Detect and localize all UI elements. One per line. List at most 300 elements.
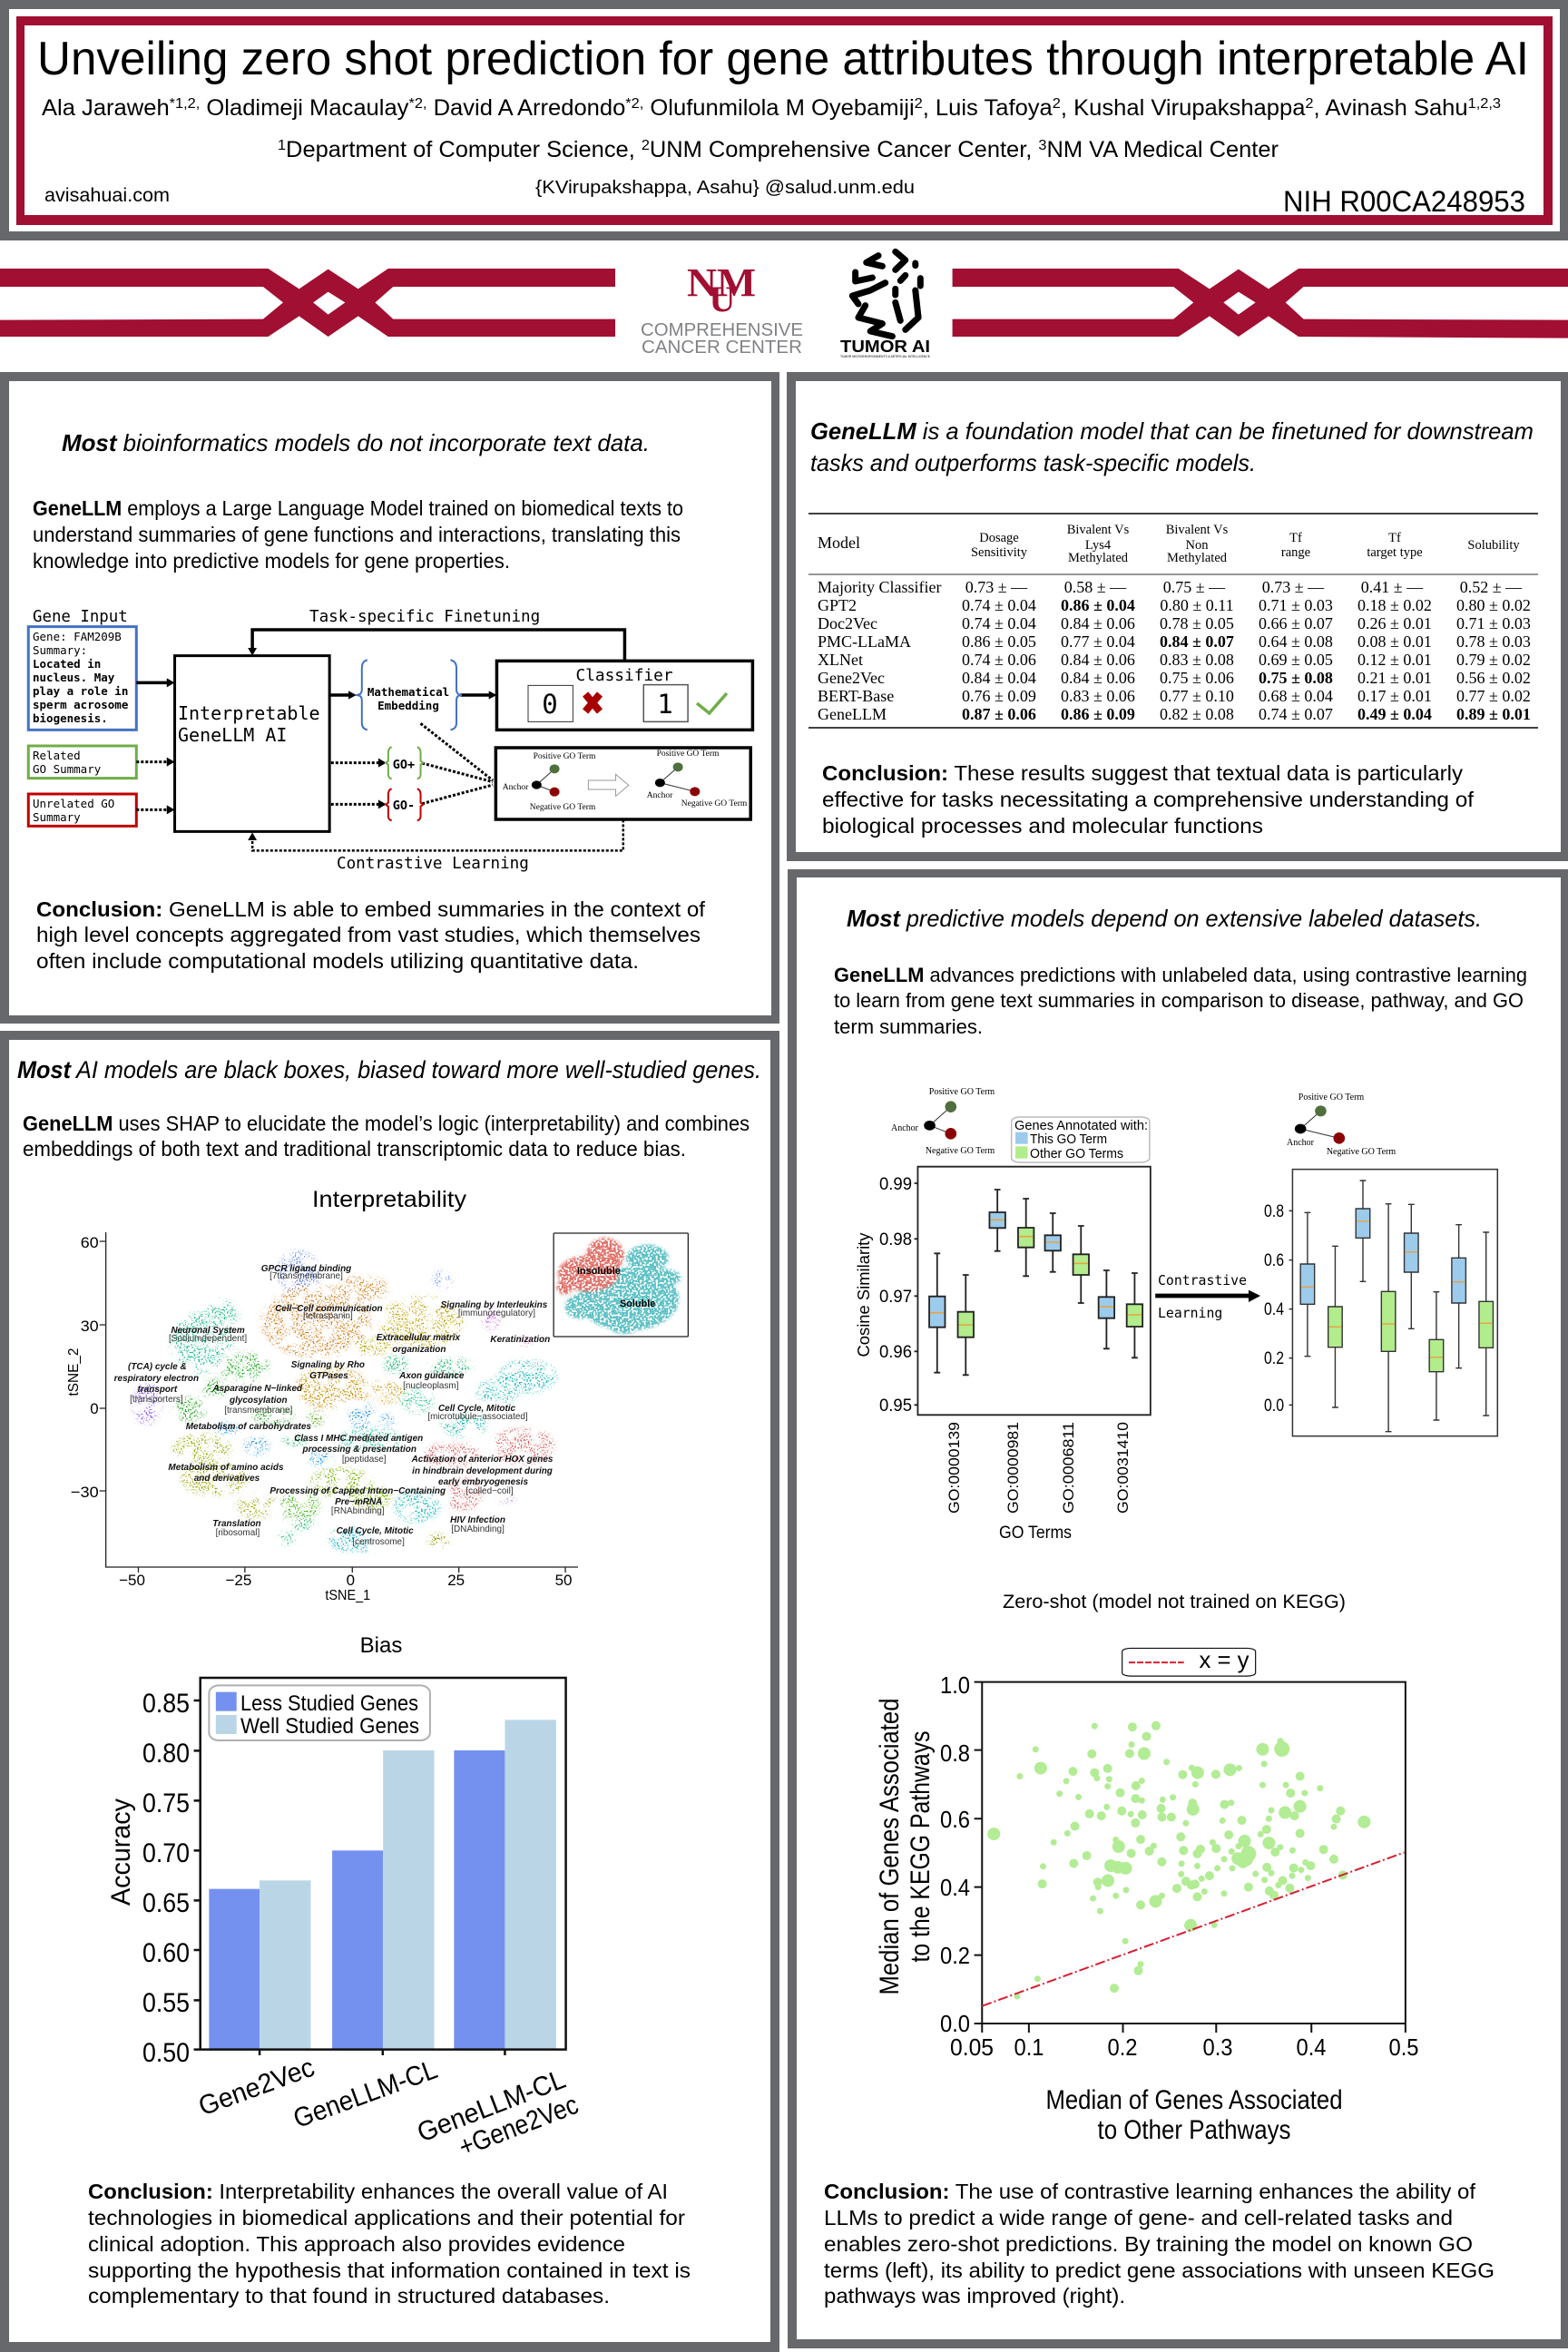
scatter y axis title: to the KEGG Pathways bbox=[906, 1731, 936, 1962]
logo: UNM comprehensive cancer center: U bbox=[710, 279, 735, 319]
conclusion text: complementary to that found in structured databases. bbox=[88, 2284, 610, 2308]
tSNE cluster labels: Signaling by Interleukins bbox=[441, 1300, 548, 1310]
conclusion text: pathways was improved (right). bbox=[824, 2284, 1125, 2308]
authors: , Kushal Virupakshappa bbox=[1061, 95, 1306, 121]
table header: range bbox=[1281, 545, 1310, 560]
gene input text: sperm acrosome bbox=[33, 698, 129, 711]
left graph icon bbox=[924, 1101, 956, 1140]
bias legend labels: Well Studied Genes bbox=[240, 1714, 419, 1739]
arrowheads bbox=[167, 648, 496, 840]
table rows: 0.87 ± 0.06 bbox=[962, 705, 1036, 723]
authors: David A Arredondo bbox=[426, 95, 625, 121]
logo: Tumor AI: TUMOR MICROENVIRONMENTS & ARTIFICIAL INTELLIGENCE bbox=[840, 354, 930, 358]
bias y tick labels: 0.50 bbox=[142, 2038, 190, 2068]
left y tick labels: 0.95 bbox=[879, 1396, 912, 1416]
GO term tick labels: GO:0000981 bbox=[1004, 1422, 1022, 1514]
class 0 box bbox=[528, 685, 573, 721]
classifier box bbox=[496, 661, 752, 730]
table rows: 0.52 ± — bbox=[1460, 578, 1523, 596]
bias y tick labels: 0.60 bbox=[142, 1938, 190, 1968]
tSNE cluster labels: [ribosomal] bbox=[216, 1528, 260, 1538]
scatter x tick labels: 0.1 bbox=[1014, 2035, 1044, 2061]
intro text bbox=[23, 1112, 750, 1161]
table header: Sensitivity bbox=[971, 545, 1028, 560]
intro text: understand summaries of gene functions and interactions, translating this bbox=[33, 523, 681, 546]
bias x labels: GeneLLM-CL bbox=[413, 2064, 570, 2148]
scatter x tick labels: 0.5 bbox=[1388, 2035, 1419, 2061]
heading: Most bioinformatics models do not incorporate text data. bbox=[62, 429, 650, 456]
right plot frame bbox=[1289, 1170, 1497, 1436]
table rows: 0.58 ± — bbox=[1064, 578, 1127, 596]
tSNE cluster labels: early embryogenesis bbox=[438, 1477, 528, 1487]
table rows: 0.80 ± 0.02 bbox=[1456, 596, 1531, 614]
conclusion text: LLMs to predict a wide range of gene- and cell-related tasks and bbox=[824, 2206, 1453, 2230]
intro text: knowledge into predictive models for gene properties. bbox=[33, 549, 510, 573]
table rows: 0.80 ± 0.11 bbox=[1160, 596, 1234, 614]
tSNE cluster labels: [centrosome] bbox=[352, 1537, 405, 1547]
left plot frame bbox=[915, 1167, 1151, 1415]
intro text: to learn from gene text summaries in comparison to disease, pathway, and GO bbox=[834, 989, 1524, 1012]
contrastive graph labels bbox=[503, 750, 748, 812]
table rows: 0.83 ± 0.06 bbox=[1061, 687, 1135, 705]
unrelated GO text: Summary bbox=[33, 810, 81, 824]
tSNE tick labels: −30 bbox=[71, 1484, 99, 1501]
authors: 1,2,3 bbox=[1468, 96, 1501, 112]
table rows: 0.75 ± — bbox=[1163, 578, 1226, 596]
tSNE clusters bbox=[132, 1250, 556, 1553]
tSNE cluster labels: [DNAbinding] bbox=[451, 1524, 505, 1534]
right y tick labels: 0.2 bbox=[1264, 1349, 1284, 1368]
website: avisahuai.com bbox=[44, 185, 170, 206]
GeneLLM label bbox=[178, 702, 320, 746]
intro text bbox=[834, 964, 1527, 1038]
solubility inset: Insoluble bbox=[577, 1266, 621, 1277]
left y tick labels: 0.99 bbox=[879, 1175, 912, 1194]
heading: Most predictive models depend on extensive labeled datasets. bbox=[847, 905, 1482, 932]
authors: *2, bbox=[408, 96, 426, 112]
logo: Tumor AI: TUMOR AI bbox=[840, 338, 930, 356]
tSNE cluster labels: respiratory electron bbox=[114, 1374, 199, 1384]
tSNE cluster labels: organization bbox=[392, 1345, 446, 1355]
graph icon labels: Negative GO Term bbox=[926, 1146, 995, 1156]
bias y tick labels: 0.70 bbox=[142, 1838, 190, 1868]
left blue boxes bbox=[929, 1212, 1114, 1328]
chart frame bbox=[194, 1678, 566, 2055]
GO term labels: GO- bbox=[393, 799, 415, 813]
scatter y tick labels: 0.6 bbox=[940, 1808, 970, 1833]
interpretability heading: Interpretability bbox=[312, 1187, 467, 1212]
table rows: 0.73 ± — bbox=[965, 578, 1028, 596]
contrastive graph labels: Positive GO Term bbox=[657, 750, 720, 759]
GO term tick labels: GO:0031410 bbox=[1114, 1422, 1132, 1514]
table header: target type bbox=[1367, 545, 1423, 560]
tSNE tick labels: −50 bbox=[119, 1572, 145, 1589]
icon: red cross bbox=[585, 694, 600, 711]
graph icon labels: Positive GO Term bbox=[929, 1087, 995, 1097]
scatter points small bbox=[1017, 1726, 1334, 1996]
table rows: 0.84 ± 0.06 bbox=[1061, 669, 1135, 687]
table rows: 0.12 ± 0.01 bbox=[1357, 651, 1432, 669]
bias x labels: GeneLLM-CL bbox=[289, 2054, 441, 2134]
right blue boxes bbox=[1300, 1209, 1465, 1304]
table rows: 0.77 ± 0.10 bbox=[1160, 687, 1234, 705]
table rows: 0.84 ± 0.04 bbox=[962, 669, 1036, 687]
contrastive graph labels: Anchor bbox=[503, 783, 529, 792]
intro text bbox=[33, 496, 683, 573]
table rules bbox=[808, 514, 1538, 728]
tSNE cluster labels: Extracellular matrix bbox=[377, 1333, 460, 1343]
right y tick labels: 0.6 bbox=[1264, 1251, 1284, 1270]
right y tick labels: 0.4 bbox=[1264, 1300, 1284, 1319]
tSNE cluster labels: Metabolism of amino acids bbox=[168, 1463, 284, 1473]
affiliations: Department of Computer Science, bbox=[286, 137, 642, 162]
x=y legend box bbox=[1122, 1648, 1256, 1676]
tSNE tick labels: −25 bbox=[225, 1572, 251, 1589]
unrelated GO box bbox=[28, 794, 136, 826]
table header: Model bbox=[818, 534, 860, 552]
right medians bbox=[1301, 1221, 1492, 1357]
authors: 2 bbox=[1305, 96, 1314, 112]
left y axis title: Cosine Similarity bbox=[855, 1232, 873, 1357]
scatter x tick labels: 0.05 bbox=[950, 2035, 994, 2061]
GO term tick labels: GO:0006811 bbox=[1060, 1422, 1077, 1514]
table rows: 0.82 ± 0.08 bbox=[1160, 705, 1234, 723]
table rows: 0.84 ± 0.07 bbox=[1160, 632, 1234, 651]
left green boxes bbox=[958, 1228, 1142, 1338]
tSNE cluster labels: [nucleoplasm] bbox=[403, 1381, 459, 1391]
conclusion text bbox=[88, 2180, 691, 2308]
scatter x axis title: to Other Pathways bbox=[1098, 2115, 1290, 2145]
grant number: NIH R00CA248953 bbox=[1283, 185, 1525, 218]
legend box bbox=[1012, 1117, 1150, 1162]
table rows: 0.08 ± 0.01 bbox=[1357, 632, 1432, 651]
scatter frame bbox=[975, 1682, 1406, 2033]
table rows: 0.68 ± 0.04 bbox=[1259, 687, 1333, 705]
table rows: 0.74 ± 0.04 bbox=[962, 596, 1036, 614]
table rows: 0.78 ± 0.03 bbox=[1456, 632, 1531, 651]
table rows: GeneLLM bbox=[818, 705, 887, 723]
affiliations: UNM Comprehensive Cancer Center, bbox=[650, 137, 1038, 162]
unrelated GO text: Unrelated GO bbox=[33, 797, 114, 810]
left whiskers bbox=[934, 1190, 1138, 1375]
related GO text: GO Summary bbox=[33, 762, 102, 776]
GO+ braces bbox=[386, 747, 423, 779]
bars GeneLLM-CL+Gene2Vec bbox=[454, 1720, 556, 2050]
tSNE cluster labels: GTPases bbox=[309, 1371, 348, 1381]
tSNE cluster labels: Class I MHC mediated antigen bbox=[294, 1434, 423, 1444]
bias legend box bbox=[209, 1685, 430, 1740]
table rows: 0.83 ± 0.08 bbox=[1160, 651, 1234, 669]
conclusion text: biological processes and molecular functions bbox=[822, 814, 1263, 838]
table header: Lys4 bbox=[1085, 538, 1112, 553]
table rows: Majority Classifier bbox=[818, 578, 941, 596]
tSNE cluster labels: glycosylation bbox=[229, 1396, 288, 1406]
table rows: 0.74 ± 0.06 bbox=[962, 651, 1036, 669]
unrelated GO text bbox=[33, 797, 114, 824]
authors: Olufunmilola M Oyebamiji bbox=[643, 95, 915, 121]
table rows: 0.84 ± 0.06 bbox=[1061, 614, 1135, 632]
table header: Methylated bbox=[1068, 551, 1129, 565]
bias x labels: +Gene2Vec bbox=[455, 2090, 583, 2162]
embedding label bbox=[368, 685, 449, 712]
finetuning label: Task-specific Finetuning bbox=[309, 608, 540, 626]
authors: *2, bbox=[625, 96, 643, 112]
gene input box bbox=[28, 627, 136, 730]
header frame bbox=[0, 0, 1568, 240]
heading: Most AI models are black boxes, biased toward more well-studied genes. bbox=[17, 1056, 761, 1083]
bias x labels bbox=[195, 2053, 583, 2162]
tSNE chart bbox=[66, 1232, 688, 1603]
bias y axis title: Accuracy bbox=[106, 1798, 136, 1906]
tSNE cluster labels: [immunoregulatory] bbox=[458, 1308, 535, 1318]
table rows: 0.74 ± 0.07 bbox=[1259, 705, 1333, 723]
classifier labels: 1 bbox=[657, 689, 673, 720]
GO term tick labels: GO:0000139 bbox=[946, 1422, 963, 1514]
GO terms axis title: GO Terms bbox=[999, 1524, 1072, 1543]
related GO box bbox=[28, 746, 136, 779]
tSNE cluster labels: [coiled−coil] bbox=[466, 1486, 514, 1496]
table rows: 0.21 ± 0.01 bbox=[1357, 669, 1432, 687]
logo: Tumor AI bbox=[840, 251, 930, 358]
affiliations: NM VA Medical Center bbox=[1047, 137, 1279, 162]
tSNE cluster labels: transport bbox=[138, 1385, 178, 1395]
right green boxes bbox=[1328, 1291, 1493, 1372]
tSNE tick labels bbox=[71, 1234, 573, 1589]
scatter y tick labels bbox=[940, 1673, 970, 2037]
solubility inset bbox=[554, 1233, 688, 1337]
scatter y tick labels: 0.4 bbox=[940, 1876, 970, 1901]
bars Gene2Vec bbox=[209, 1880, 310, 2050]
table rows: Doc2Vec bbox=[818, 614, 877, 632]
graph icon labels: Negative GO Term bbox=[1327, 1147, 1396, 1157]
authors: 2 bbox=[1053, 96, 1061, 112]
bias y tick labels bbox=[142, 1689, 190, 2068]
tSNE cluster labels: Axon guidance bbox=[398, 1371, 465, 1381]
table rows: 0.18 ± 0.02 bbox=[1357, 596, 1432, 614]
logo: UNM comprehensive cancer center bbox=[641, 260, 803, 358]
embedding label: Embedding bbox=[377, 699, 439, 712]
tSNE cluster labels: Processing of Capped Intron−Containing bbox=[270, 1486, 446, 1496]
logo: UNM comprehensive cancer center: COMPREHENSIVE bbox=[641, 320, 803, 340]
affiliations: 1 bbox=[278, 138, 286, 153]
solubility inset: Soluble bbox=[620, 1298, 655, 1309]
table header bbox=[818, 523, 1520, 565]
GeneLLM label: Interpretable bbox=[178, 702, 320, 724]
table header: Tf bbox=[1388, 531, 1401, 545]
workflow diagram bbox=[28, 608, 752, 873]
tSNE axis titles: tSNE_1 bbox=[325, 1588, 370, 1603]
tSNE cluster labels: Translation bbox=[212, 1519, 261, 1529]
left medians bbox=[930, 1220, 1142, 1325]
tSNE cluster labels bbox=[114, 1264, 554, 1547]
legend labels: This GO Term bbox=[1030, 1132, 1107, 1147]
logo: UNM comprehensive cancer center: NM bbox=[687, 260, 756, 305]
table rows: 0.76 ± 0.09 bbox=[962, 687, 1036, 705]
zero-shot caption: Zero-shot (model not trained on KEGG) bbox=[1003, 1592, 1346, 1612]
scatter y tick labels: 1.0 bbox=[940, 1673, 970, 1699]
GO term labels bbox=[393, 758, 415, 813]
scatter x tick labels: 0.2 bbox=[1107, 2035, 1138, 2061]
legend label: x = y bbox=[1200, 1646, 1249, 1673]
conclusion text: effective for tasks necessitating a comprehensive understanding of bbox=[822, 788, 1475, 811]
tSNE cluster labels: [7transmembrane] bbox=[270, 1271, 343, 1281]
table rows: 0.86 ± 0.05 bbox=[962, 632, 1036, 651]
legend labels bbox=[1014, 1118, 1148, 1161]
legend labels: Genes Annotated with: bbox=[1014, 1118, 1148, 1133]
GO- braces bbox=[386, 789, 423, 820]
table rows: 0.66 ± 0.07 bbox=[1259, 614, 1333, 632]
tSNE cluster labels: Cell Cycle, Mitotic bbox=[438, 1404, 516, 1414]
right y tick labels bbox=[1264, 1202, 1284, 1416]
classifier labels: Classifier bbox=[575, 666, 673, 685]
table header: Solubility bbox=[1467, 538, 1520, 553]
intro text: term summaries. bbox=[834, 1015, 983, 1038]
gene input text bbox=[33, 630, 129, 725]
table rows: 0.84 ± 0.06 bbox=[1061, 651, 1135, 669]
conclusion text: clinical adoption. This approach also provides evidence bbox=[88, 2232, 625, 2256]
panel: foundation model bbox=[787, 372, 1568, 861]
table rows: 0.73 ± — bbox=[1262, 578, 1325, 596]
scatter points extra large bbox=[1246, 1749, 1282, 1858]
contrastive learning label: Contrastive Learning bbox=[337, 855, 529, 873]
scatter y axis title bbox=[875, 1699, 936, 1994]
gene input text: nucleus. May bbox=[33, 671, 115, 684]
x=y reference line bbox=[982, 1852, 1405, 2006]
authors: , Avinash Sahu bbox=[1314, 95, 1468, 121]
graph icon labels: Anchor bbox=[1287, 1138, 1315, 1148]
panel: black boxes and bias bbox=[0, 1031, 779, 2352]
bias heading: Bias bbox=[360, 1633, 402, 1658]
scatter plot bbox=[875, 1646, 1419, 2145]
right whiskers bbox=[1305, 1181, 1489, 1432]
tSNE cluster labels: and derivatives bbox=[194, 1474, 260, 1484]
table rows: 0.49 ± 0.04 bbox=[1357, 705, 1432, 723]
conclusion text bbox=[822, 761, 1475, 838]
panel: labeled datasets bbox=[788, 869, 1568, 2348]
GO term tick labels bbox=[946, 1422, 1132, 1514]
conclusion text: high level concepts aggregated from vast studies, which themselves bbox=[36, 923, 701, 946]
affiliations: 2 bbox=[642, 138, 650, 153]
tSNE tick labels: 30 bbox=[81, 1318, 99, 1335]
authors: , Luis Tafoya bbox=[923, 95, 1053, 121]
scatter points large bbox=[994, 1749, 1364, 1926]
bias bar chart bbox=[106, 1678, 583, 2162]
heading bbox=[810, 417, 1534, 476]
affiliations: 3 bbox=[1038, 138, 1047, 153]
scatter y axis title: Median of Genes Associated bbox=[875, 1699, 905, 1994]
tSNE tick labels: 0 bbox=[347, 1572, 355, 1589]
tSNE axis titles: tSNE_2 bbox=[66, 1348, 82, 1396]
table header: Dosage bbox=[979, 531, 1019, 545]
decorative ribbon right bbox=[953, 269, 1568, 338]
conclusion text: enables zero-shot predictions. By training the model on known GO bbox=[824, 2232, 1473, 2256]
conclusion text: Conclusion: GeneLLM is able to embed summaries in the context of bbox=[36, 897, 706, 921]
scatter x axis title: Median of Genes Associated bbox=[1045, 2085, 1343, 2115]
tSNE cluster labels: Metabolism of carbohydrates bbox=[186, 1422, 311, 1432]
bars GeneLLM-CL bbox=[332, 1750, 435, 2050]
table rows: 0.77 ± 0.04 bbox=[1061, 632, 1135, 651]
table rows: 0.17 ± 0.01 bbox=[1357, 687, 1432, 705]
authors: Oladimeji Macaulay bbox=[200, 95, 409, 121]
tSNE cluster labels: [microtubule−associated] bbox=[427, 1412, 528, 1422]
related GO text: Related bbox=[33, 749, 81, 762]
embedding braces bbox=[356, 660, 462, 730]
tSNE cluster labels: Neuronal System bbox=[171, 1326, 245, 1336]
heading: GeneLLM is a foundation model that can be finetuned for downstream bbox=[810, 417, 1534, 445]
tSNE cluster labels: Cell Cycle, Mitotic bbox=[337, 1526, 414, 1536]
authors: Ala Jaraweh bbox=[42, 95, 167, 121]
table rows: 0.75 ± 0.08 bbox=[1259, 669, 1333, 687]
table rows: PMC-LLaMA bbox=[818, 632, 911, 651]
solid arrows bbox=[136, 630, 624, 695]
left y tick labels bbox=[879, 1175, 912, 1416]
table rows: 0.86 ± 0.09 bbox=[1061, 705, 1135, 723]
tSNE axes bbox=[100, 1232, 578, 1573]
GO term labels: GO+ bbox=[393, 758, 415, 772]
bias y tick labels: 0.75 bbox=[142, 1788, 190, 1818]
box plots bbox=[855, 1087, 1497, 1543]
tSNE cluster labels: in hindbrain development during bbox=[412, 1466, 553, 1476]
panel: text data bbox=[0, 372, 779, 1024]
class 1 box bbox=[643, 685, 688, 721]
gene input text: Gene: FAM209B bbox=[33, 630, 122, 643]
results table bbox=[808, 514, 1538, 728]
intro text: GeneLLM advances predictions with unlabeled data, using contrastive learning bbox=[834, 964, 1527, 986]
right y tick labels: 0.8 bbox=[1264, 1202, 1284, 1221]
dotted arrows bbox=[136, 723, 493, 809]
tSNE cluster labels: [tetraspanin] bbox=[303, 1311, 353, 1321]
tSNE cluster labels: Cell−Cell communication bbox=[275, 1304, 383, 1314]
bias x labels: Gene2Vec bbox=[195, 2053, 318, 2122]
conclusion text: terms (left), its ability to predict gene associations with unseen KEGG bbox=[824, 2259, 1494, 2282]
tSNE tick labels: 0 bbox=[90, 1400, 99, 1417]
authors: 2 bbox=[915, 96, 923, 112]
right y tick labels: 0.0 bbox=[1264, 1396, 1284, 1416]
tSNE cluster labels: [transmembrane] bbox=[224, 1406, 293, 1416]
left y tick labels: 0.96 bbox=[879, 1343, 912, 1362]
tSNE tick labels: 25 bbox=[447, 1572, 465, 1589]
embedding label: Mathematical bbox=[368, 685, 449, 699]
scatter y tick labels: 0.8 bbox=[940, 1741, 970, 1767]
GeneLLM label: GeneLLM AI bbox=[178, 724, 287, 746]
scatter x axis title bbox=[1045, 2085, 1343, 2145]
table rows: 0.26 ± 0.01 bbox=[1357, 614, 1432, 632]
table rows: 0.77 ± 0.02 bbox=[1456, 687, 1531, 705]
tSNE cluster labels: Keratinization bbox=[490, 1335, 550, 1345]
arrow labels: Contrastive bbox=[1158, 1273, 1247, 1289]
tSNE cluster labels: processing & presentation bbox=[302, 1445, 416, 1455]
contrastive graph before bbox=[536, 769, 554, 792]
tSNE cluster labels: [transporters] bbox=[130, 1395, 183, 1405]
graph icon labels: Anchor bbox=[891, 1123, 919, 1133]
table rows: GPT2 bbox=[818, 596, 857, 614]
graph icon labels: Positive GO Term bbox=[1298, 1093, 1364, 1102]
intro text: embeddings of both text and traditional transcriptomic data to reduce bias. bbox=[23, 1137, 686, 1161]
contrastive graph labels: Negative GO Term bbox=[530, 803, 596, 812]
classifier labels: 0 bbox=[542, 689, 558, 720]
table header: Non bbox=[1186, 538, 1209, 553]
intro text: GeneLLM uses SHAP to elucidate the model’s logic (interpretability) and combines bbox=[23, 1112, 750, 1135]
left y tick labels: 0.98 bbox=[879, 1230, 912, 1250]
scatter x tick labels bbox=[950, 2035, 1419, 2061]
table rows: 0.79 ± 0.02 bbox=[1456, 651, 1531, 669]
conclusion text bbox=[824, 2180, 1494, 2308]
scatter x tick labels: 0.3 bbox=[1203, 2035, 1232, 2061]
tSNE cluster labels: [Sodiumdependent] bbox=[169, 1334, 247, 1344]
conclusion text: Conclusion: The use of contrastive learning enhances the ability of bbox=[824, 2180, 1476, 2203]
bias y tick labels: 0.65 bbox=[142, 1888, 190, 1918]
gene input text: Summary: bbox=[33, 643, 87, 657]
